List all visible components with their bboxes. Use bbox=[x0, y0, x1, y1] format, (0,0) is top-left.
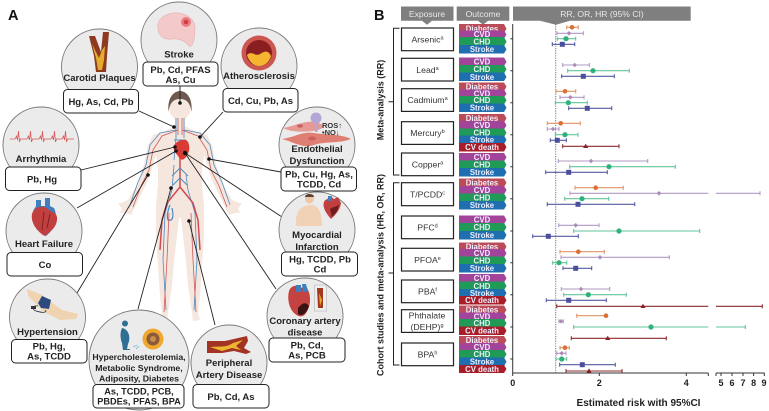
exposures box bbox=[143, 62, 218, 86]
panel label A: A bbox=[8, 8, 19, 24]
outcome tags: Stroke bbox=[470, 168, 495, 177]
outcome tags: Diabetes bbox=[466, 82, 499, 92]
outcome tags: CV death bbox=[465, 326, 499, 336]
icon: endothelial cells bbox=[282, 112, 351, 146]
outcome tags: CVD bbox=[474, 186, 491, 195]
estimates: phthalate bbox=[559, 313, 745, 340]
label: Adiposity, Diabetes bbox=[99, 374, 179, 384]
outcome tags: CHD bbox=[474, 223, 491, 232]
estimates: cadmium bbox=[555, 89, 612, 111]
icon: obese person and fat cell bbox=[120, 320, 164, 350]
exposures box: Cd, Cu, Pb, As bbox=[228, 96, 293, 107]
ROS and NO labels: ROS↑ bbox=[322, 121, 342, 130]
label: Stroke bbox=[164, 50, 194, 60]
label: Metabolic Syndrome, bbox=[95, 363, 183, 373]
exposure boxes: Phthalate bbox=[409, 310, 446, 320]
estimates: PBA bbox=[546, 287, 762, 308]
reference line at 1 bbox=[555, 24, 557, 373]
outcome tags: CHD bbox=[474, 350, 491, 359]
exposures box bbox=[281, 167, 356, 191]
estimates: mercury bbox=[547, 121, 619, 148]
icon: heart bbox=[32, 198, 57, 236]
outcome tags: CV death bbox=[465, 296, 499, 305]
exposures box: Hg, As, Cd, Pb bbox=[68, 97, 134, 108]
exposures box bbox=[269, 338, 345, 362]
header: Outcome bbox=[457, 6, 509, 25]
panel B: forest plot bbox=[374, 6, 767, 409]
outcome tags: Stroke bbox=[470, 45, 495, 54]
exposures box: Pb, Cu, Hg, As, bbox=[285, 170, 353, 180]
exposures box: PBDEs, PFAS, BPA bbox=[97, 396, 181, 406]
forest plot axes: 9 bbox=[761, 378, 767, 388]
exposures box: Pb, Cd, PFAS bbox=[150, 65, 211, 76]
outcome tags: Diabetes bbox=[466, 242, 499, 252]
forest plot axes: 7 bbox=[740, 378, 746, 388]
exposures box bbox=[12, 340, 87, 363]
outcome tags: CVD bbox=[474, 312, 491, 322]
exposure boxes: g bbox=[440, 323, 444, 329]
exposure boxes: h bbox=[434, 350, 437, 356]
label: Coronary artery bbox=[269, 316, 341, 327]
outcome tags: Stroke bbox=[470, 231, 495, 240]
human body with vascular system bbox=[118, 91, 242, 321]
exposures box: Pb, Hg bbox=[27, 174, 57, 186]
outcome tags: Stroke bbox=[470, 264, 495, 273]
outcome tags: CVD bbox=[474, 216, 491, 224]
outcome tags: CVD bbox=[474, 274, 491, 283]
exposure boxes: a bbox=[440, 36, 444, 42]
outcome tags: Diabetes bbox=[466, 306, 499, 314]
label: Myocardial bbox=[292, 230, 342, 241]
label: Peripheral bbox=[206, 358, 252, 369]
estimates: T/PCDD bbox=[547, 185, 760, 207]
estimates: arsenic bbox=[552, 25, 583, 47]
exposure boxes: Mercury bbox=[410, 128, 442, 138]
outcome: arrhythmia bbox=[3, 107, 81, 190]
exposures box bbox=[93, 384, 184, 408]
exposure boxes: Copper bbox=[412, 160, 440, 170]
exposure boxes: Arsenic bbox=[411, 34, 440, 44]
label: Dysfunction bbox=[290, 156, 345, 167]
estimates: copper bbox=[546, 159, 675, 175]
estimates: lead bbox=[562, 63, 629, 79]
outcome tags: Diabetes bbox=[466, 114, 499, 123]
forest plot axes bbox=[510, 24, 767, 409]
label: Hypercholesterolemia, bbox=[92, 352, 186, 362]
ROS and NO labels: •NO↓ bbox=[322, 128, 340, 137]
outcome tags: CVD bbox=[474, 58, 491, 66]
exposures box: As, Cu bbox=[165, 75, 196, 86]
outcome tags: CVD bbox=[474, 30, 491, 39]
exposures box: TCDD, Cd bbox=[297, 180, 341, 190]
exposure boxes: a bbox=[445, 96, 449, 102]
exposures box bbox=[282, 252, 358, 276]
label: Atherosclerosis bbox=[223, 71, 295, 82]
icon: arm with cuff bbox=[27, 289, 78, 320]
bracket: cohort studies and meta-analysis bbox=[376, 174, 400, 376]
forest plot axes: 0 bbox=[510, 378, 515, 388]
outcome: heart failure bbox=[6, 193, 82, 276]
outcome: stroke bbox=[141, 2, 218, 86]
header: Outcome: Outcome bbox=[466, 9, 501, 19]
outcome tags: Diabetes bbox=[466, 336, 499, 345]
header: Exposure: Exposure bbox=[409, 9, 445, 19]
outcome tags: CHD bbox=[474, 128, 491, 138]
exposures box: As, PCB bbox=[288, 350, 326, 362]
label: Hypertension bbox=[17, 327, 78, 338]
header: RR, OR, HR (95% CI): RR, OR, HR (95% CI) bbox=[560, 9, 644, 19]
panel A: exposures and cardiovascular outcomes bbox=[3, 2, 358, 410]
outcome tags: CHD bbox=[474, 65, 491, 74]
exposures box: Pb, Cd, bbox=[291, 340, 323, 352]
outcome tags bbox=[459, 24, 506, 374]
forest plot axes: 6 bbox=[729, 378, 735, 388]
label: Heart Failure bbox=[15, 239, 73, 250]
outcome tags: Stroke bbox=[470, 201, 495, 210]
icon: carotid artery bbox=[89, 32, 109, 72]
outcome tags: Stroke bbox=[470, 73, 495, 82]
label: Endothelial bbox=[291, 144, 343, 155]
outcome: coronary artery disease bbox=[267, 278, 345, 362]
label bbox=[292, 230, 342, 253]
header: RR, OR, HR (95% CI) bbox=[513, 6, 691, 25]
icon: ECG trace bbox=[10, 131, 74, 142]
exposures box: As, TCDD, PCB, bbox=[104, 386, 174, 396]
outcome tags: CV death bbox=[465, 365, 499, 374]
outcome: metabolic disorders bbox=[89, 310, 189, 410]
outcome tags: CVD bbox=[474, 343, 491, 352]
exposures box: Pb, Cd, As bbox=[207, 392, 255, 403]
outcome: peripheral artery disease bbox=[191, 325, 269, 408]
icon: heart and coronary artery bbox=[288, 284, 326, 316]
outcome tags: CVD bbox=[474, 121, 491, 130]
outcome tags: Stroke bbox=[470, 136, 495, 144]
icon: artery cross-section bbox=[242, 36, 276, 70]
icon: peripheral artery bbox=[207, 336, 251, 354]
label: Carotid Plaques bbox=[63, 73, 136, 84]
exposure boxes: BPA bbox=[418, 350, 434, 360]
exposure boxes: d bbox=[435, 224, 438, 230]
bracket: meta-analysis: Meta-analysis (RR) bbox=[376, 60, 386, 140]
exposures box: Cd bbox=[314, 264, 327, 276]
outcome: hypertension bbox=[10, 279, 87, 363]
outcome tags: CVD bbox=[474, 153, 491, 162]
label bbox=[269, 316, 341, 338]
outcome tags: CHD bbox=[474, 256, 491, 266]
label bbox=[290, 144, 345, 167]
bracket: meta-analysis bbox=[376, 28, 400, 175]
estimates: PFC bbox=[533, 223, 700, 239]
exposure boxes: f bbox=[435, 288, 437, 294]
outcome tags: CVD bbox=[474, 90, 491, 98]
exposure boxes: (DEHP) bbox=[410, 322, 440, 332]
exposure boxes bbox=[402, 28, 454, 366]
outcome: atherosclerosis bbox=[221, 28, 298, 112]
forest plot axes: 2 bbox=[597, 378, 602, 388]
exposure boxes: Lead bbox=[416, 65, 436, 75]
outcome tags: Stroke bbox=[470, 358, 495, 366]
exposure boxes: PFC bbox=[417, 222, 435, 232]
label: Artery Disease bbox=[196, 370, 262, 381]
icon: person with heart bbox=[296, 194, 341, 226]
estimates: BPA bbox=[556, 345, 622, 373]
label bbox=[196, 358, 262, 381]
exposure boxes: b bbox=[442, 129, 445, 135]
exposures box: Hg, TCDD, Pb bbox=[289, 254, 351, 266]
outcome: carotid plaques bbox=[62, 29, 138, 113]
exposures box: Co bbox=[39, 260, 52, 271]
outcome tags: CHD bbox=[474, 194, 491, 202]
outcome tags: CHD bbox=[474, 96, 491, 105]
label: disease bbox=[288, 328, 322, 338]
exposure boxes: PFOA bbox=[414, 255, 438, 265]
estimates: PFOA bbox=[553, 249, 669, 271]
outcome tags: CVD bbox=[474, 249, 491, 258]
exposure boxes: a bbox=[436, 66, 440, 72]
label: Infarction bbox=[295, 242, 339, 253]
forest plot axes: 8 bbox=[751, 378, 756, 388]
bracket: cohort studies and meta-analysis: Cohort studies and meta-analysis (HR, OR, RR) bbox=[376, 174, 386, 376]
outcome tags: Diabetes bbox=[466, 24, 499, 34]
panel label B: B bbox=[374, 8, 384, 24]
exposure boxes: e bbox=[438, 256, 441, 262]
outcome tags: CHD bbox=[474, 160, 491, 170]
leader lines with dots bbox=[77, 86, 282, 325]
forest plot axes: 5 bbox=[718, 378, 724, 388]
outcome tags: Diabetes bbox=[466, 178, 499, 188]
exposure boxes: T/PCDD bbox=[410, 190, 442, 200]
outcome tags: CHD bbox=[474, 282, 491, 291]
outcome tags: CV death bbox=[465, 143, 499, 152]
outcome: myocardial infarction bbox=[279, 192, 358, 276]
exposures box: As, TCDD bbox=[27, 352, 71, 362]
ROS and NO labels bbox=[322, 121, 342, 137]
outcome tags: CHD bbox=[474, 38, 491, 46]
exposure boxes: Cadmium bbox=[407, 95, 445, 105]
label: Arrhythmia bbox=[16, 154, 67, 165]
outcome tags: Stroke bbox=[470, 104, 495, 112]
exposure boxes: c bbox=[442, 190, 445, 196]
outcome tags: CHD bbox=[474, 319, 491, 328]
outcome: endothelial dysfunction bbox=[279, 107, 356, 191]
icon: brain bbox=[158, 13, 195, 47]
forest plot axes: Estimated risk with 95%CI bbox=[577, 398, 701, 409]
exposure boxes: PBA bbox=[418, 286, 435, 296]
label bbox=[92, 352, 186, 384]
header: Exposure bbox=[401, 6, 454, 25]
exposure boxes: a bbox=[440, 160, 444, 166]
forest plot axes: 4 bbox=[684, 378, 689, 388]
exposures box: Pb, Hg, bbox=[33, 342, 65, 352]
outcome tags: Stroke bbox=[470, 289, 495, 298]
